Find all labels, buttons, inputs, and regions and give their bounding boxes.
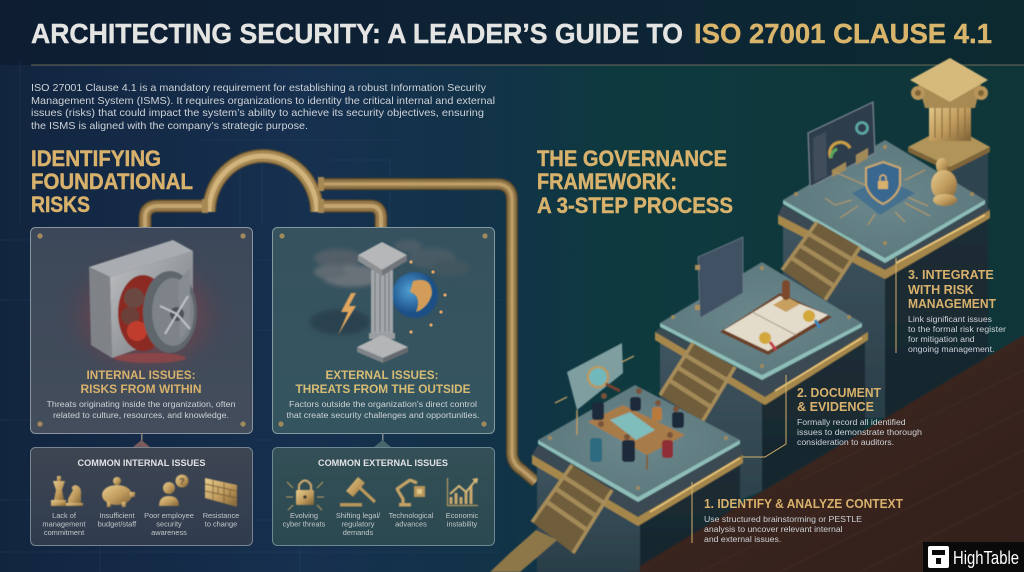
external issue labels: Technological xyxy=(389,511,434,520)
wood floor xyxy=(627,335,1024,572)
internal issue labels: Lack of xyxy=(52,511,77,520)
intro paragraph xyxy=(31,83,495,132)
external issues title: THREATS FROM THE OUTSIDE xyxy=(296,382,470,396)
icon: brick wall xyxy=(205,478,237,507)
icon: padlock cyber threats xyxy=(286,480,324,510)
internal issue labels: security xyxy=(156,520,182,528)
step 2 text: consideration to auditors. xyxy=(797,437,894,447)
intro paragraph: issues (risks) that could impact the system’s ability to achieve its security objectives, ensuring xyxy=(31,108,484,119)
step 3 text: 3. INTEGRATE xyxy=(908,268,994,282)
step 1 text: and external issues. xyxy=(704,534,781,544)
heading: governance framework: THE GOVERNANCE xyxy=(537,146,727,171)
platform 1: identify and analyze xyxy=(490,343,743,572)
external issue labels: advances xyxy=(395,520,427,528)
icon: employee question xyxy=(159,474,188,506)
connector: external panels xyxy=(374,433,391,447)
intro paragraph: Management System (ISMS). It requires organizations to identity the critical internal and external xyxy=(31,96,495,107)
external issue labels: Shifting legal/ xyxy=(336,511,381,520)
icon: chess pieces xyxy=(51,476,83,506)
internal issue labels: to change xyxy=(205,520,237,528)
heading: governance framework xyxy=(537,146,733,218)
internal issues title xyxy=(80,368,202,396)
icon: vault with gears xyxy=(89,240,197,363)
heading: identifying foundational risks xyxy=(31,146,193,217)
binder book xyxy=(695,237,743,318)
connector: internal panels xyxy=(133,433,150,447)
gold column xyxy=(908,58,990,215)
internal issue labels: awareness xyxy=(151,528,187,537)
external issues title: EXTERNAL ISSUES: xyxy=(326,368,438,382)
heading: identifying foundational risks: FOUNDATIONAL xyxy=(31,169,193,194)
panel: common internal issues xyxy=(30,448,252,546)
internal issues description: related to culture, resources, and knowledge. xyxy=(53,410,229,420)
internal issue labels: commitment xyxy=(44,528,84,537)
panel: external issues xyxy=(272,228,494,434)
icon: gold knight xyxy=(931,158,957,206)
step 1 text: Use structured brainstorming or PESTLE xyxy=(704,514,862,524)
stairs 2 xyxy=(660,343,735,422)
external issue labels: Evolving xyxy=(290,511,318,520)
step 3 text: WITH RISK xyxy=(908,283,974,297)
external issues description: that create security challenges and opportunities. xyxy=(286,410,480,420)
step 2 text: & EVIDENCE xyxy=(797,400,874,414)
common external title: COMMON EXTERNAL ISSUES xyxy=(318,458,449,469)
external issue labels xyxy=(283,511,479,537)
internal issue labels xyxy=(42,511,239,537)
heading: governance framework: A 3-STEP PROCESS xyxy=(537,193,733,218)
panel: internal issues xyxy=(30,228,252,434)
circuit chip and shield xyxy=(825,162,930,225)
step 3 text: MANAGEMENT xyxy=(908,297,996,311)
intro paragraph: the ISMS is aligned with the company’s strategic purpose. xyxy=(31,121,308,132)
step 2 text: Formally record all identified xyxy=(797,417,906,427)
open book with stamp xyxy=(720,280,832,355)
step 1 text: 1. IDENTIFY & ANALYZE CONTEXT xyxy=(704,497,903,511)
step 3 text: for mitigation and xyxy=(908,334,975,344)
heading: identifying foundational risks: RISKS xyxy=(31,192,90,217)
step 2 text xyxy=(743,375,922,457)
intro paragraph: ISO 27001 Clause 4.1 is a mandatory requirement for establishing a robust Information Security xyxy=(31,83,487,94)
meeting table with people xyxy=(588,388,685,470)
internal issue labels: Poor employee xyxy=(144,511,194,520)
stairs 1 xyxy=(490,465,612,572)
internal issue labels: management xyxy=(42,520,86,528)
external issue labels: regulatory xyxy=(342,520,375,528)
step 1 text: analysis to uncover relevant internal xyxy=(704,524,843,534)
internal issue labels: Insufficient xyxy=(99,511,135,520)
platform 3: integrate with risk management xyxy=(778,58,990,418)
icon: gavel xyxy=(340,477,375,506)
external issue labels: instability xyxy=(447,520,477,528)
icon: pillar with storm and globe xyxy=(310,240,470,363)
external issue labels: demands xyxy=(343,528,374,537)
internal issues title: RISKS FROM WITHIN xyxy=(80,382,202,396)
internal issue labels: budget/staff xyxy=(98,520,137,528)
external issue labels: cyber threats xyxy=(283,520,326,528)
external issues description: Factors outside the organization's direct control xyxy=(289,399,477,409)
step 2 text: issues to demonstrate thorough xyxy=(797,427,922,437)
title: ARCHITECTING SECURITY: A LEADER’S GUIDE TO xyxy=(31,18,683,49)
internal issues description: Threats originating inside the organization, often xyxy=(46,399,236,409)
icon: employee question: ? xyxy=(179,476,185,486)
external issues description xyxy=(286,399,480,420)
internal issues description xyxy=(46,399,236,420)
heading: governance framework: FRAMEWORK: xyxy=(537,169,677,194)
step 3 text: ongoing management. xyxy=(908,344,994,354)
step 3 text: to the formal risk register xyxy=(908,324,1006,334)
map sign with magnifier xyxy=(555,343,634,435)
step 2 text: 2. DOCUMENT xyxy=(797,386,881,400)
panel: common external issues xyxy=(272,448,494,546)
internal issues title: INTERNAL ISSUES: xyxy=(86,368,196,382)
common internal title: COMMON INTERNAL ISSUES xyxy=(78,458,206,469)
step 3 text xyxy=(896,258,1006,354)
top header band xyxy=(0,0,1024,65)
logo: HighTable xyxy=(923,542,1024,572)
internal issue labels: Resistance xyxy=(203,511,239,520)
step 1 text xyxy=(692,482,903,544)
brass pipes xyxy=(145,156,536,482)
dashboard monitor xyxy=(808,102,875,187)
icon: robotic arm xyxy=(397,480,425,506)
external issues title xyxy=(296,368,470,396)
external issue labels: Economic xyxy=(446,511,479,520)
icon: growth chart xyxy=(448,478,478,506)
icon: piggy bank xyxy=(102,477,135,507)
platform 2: document and evidence xyxy=(655,237,868,530)
stairs 3 xyxy=(782,222,860,300)
step 3 text: Link significant issues xyxy=(908,314,993,324)
heading: identifying foundational risks: IDENTIFYING xyxy=(31,146,161,171)
title: ISO 27001 CLAUSE 4.1 xyxy=(694,18,992,49)
